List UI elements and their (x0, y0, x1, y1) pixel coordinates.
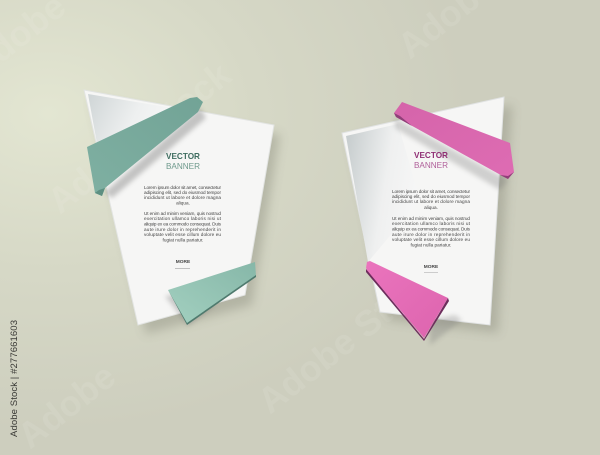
watermarks: Stock (360, 163, 463, 256)
body text: aliqua. (176, 200, 190, 206)
card inner shading (346, 124, 420, 262)
watermarks: Adobe (10, 355, 123, 455)
heading: VECTOR (414, 151, 448, 160)
body text: Ut enim ad minim veniam, quis nostrud (392, 216, 470, 221)
body text: exercitation ullamco laboris nisi ut (392, 221, 471, 226)
card shadow (350, 105, 512, 333)
banner: green (84, 90, 280, 334)
banner: pink (342, 97, 514, 345)
card shadow (92, 100, 280, 334)
heading (414, 151, 448, 170)
heading: VECTOR (166, 152, 200, 161)
ribbon shadow (105, 108, 206, 198)
top ribbon (87, 97, 203, 196)
watermarks: Adobe Stock (250, 253, 449, 421)
body text (392, 189, 471, 248)
stock id label: Adobe Stock | #277661603 (9, 320, 20, 437)
body text: aliquip ex ea commodo consequat. Duis (392, 226, 471, 232)
more link: MORE (424, 264, 439, 270)
body text: incididunt ut labore et dolore magna (392, 199, 470, 204)
body text: voluptate velit esse cillum dolore eu (144, 232, 221, 237)
body text: Lorem ipsum dolor sit amet, consectetur (144, 185, 221, 190)
lower ribbon (366, 261, 449, 341)
body text: aliqua. (424, 205, 438, 210)
card inner shading (88, 94, 172, 160)
lower ribbon shadow (430, 315, 462, 345)
lower ribbon shadow (165, 292, 215, 326)
body text: fugiat nulla pariatur. (411, 242, 451, 248)
top ribbon (394, 102, 514, 179)
body text: voluptate velit esse cillum dolore eu (392, 237, 470, 242)
more link (175, 259, 191, 269)
heading: BANNER (166, 162, 200, 171)
body text: Lorem ipsum dolor sit amet, consectetur (392, 189, 470, 194)
lower ribbon (168, 262, 256, 325)
heading: BANNER (414, 161, 448, 170)
body text: incididunt ut labore et dolore magna (144, 195, 221, 200)
more link (424, 264, 439, 273)
body text: exercitation ullamco laboris nisi ut (144, 216, 222, 221)
heading (166, 152, 200, 171)
body text: fugiat nulla pariatur. (163, 238, 203, 242)
white card (84, 90, 274, 325)
watermarks: Adobe Stock (40, 53, 239, 221)
body text: adipiscing elit, sed do eiusmod tempor (392, 194, 470, 199)
more link: MORE (176, 259, 191, 265)
body text (144, 185, 222, 242)
white card (342, 97, 504, 325)
body text: adipiscing elit, sed do eiusmod tempor (144, 190, 221, 195)
ribbon shadow (395, 118, 508, 190)
body text: Ut enim ad minim veniam, quis nostrud (144, 211, 221, 216)
body text: aliquip ex ea commodo consequat. Duis (144, 222, 222, 226)
body text: aute irure dolor in reprehenderit in (392, 232, 470, 237)
body text: aute irure dolor in reprehenderit in (144, 227, 221, 232)
